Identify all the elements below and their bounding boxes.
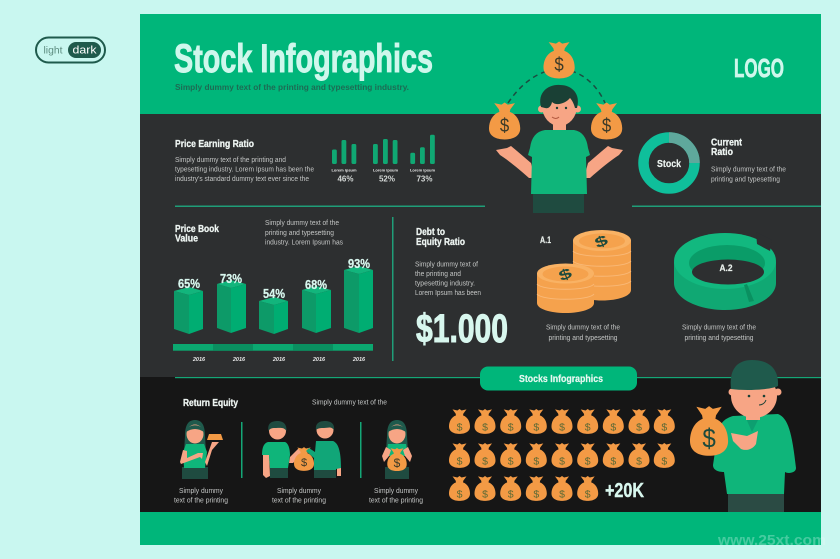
pictogram: money bag grid: $: [585, 455, 591, 467]
caption: A.2: printing and typesetting: [684, 335, 754, 342]
mini bar chart: 52%: [379, 174, 395, 184]
pictogram: money bag grid: $: [661, 421, 667, 433]
icon: large money bag: [690, 406, 728, 456]
pictogram: money bag grid: $: [559, 455, 565, 467]
mini bar chart: Lorem ipsum: [331, 168, 357, 172]
pictogram: money bag grid: $: [636, 421, 642, 433]
bar: 73%: 73%: [220, 272, 242, 286]
callout: +20K: +20K: [605, 480, 644, 502]
icon: coin stacks: $: [593, 232, 611, 252]
watermark: www.25xt.com: [717, 532, 826, 549]
text block: debt to equity ratio: [415, 262, 481, 297]
captions: return equity figures: Simply dummy: [277, 488, 321, 495]
big number: $1.000: $1.000: [416, 307, 508, 351]
divider: [360, 422, 362, 478]
dashed arc between bags: [508, 71, 605, 103]
captions: return equity figures: Simply dummy: [179, 488, 223, 495]
bar: 93%: [344, 257, 373, 333]
text block: debt to equity ratio: Simply dummy text of: [415, 262, 478, 268]
pictogram: money bag grid: $: [559, 421, 565, 433]
caption: A.2: Simply dummy text of the: [682, 324, 756, 332]
pictogram: money bag grid: $: [610, 455, 616, 467]
mini bar chart: [331, 135, 435, 184]
icon: left money bag: $: [500, 115, 509, 137]
pictogram: money bag grid: $: [636, 455, 642, 467]
axis years: 2016: [232, 357, 246, 363]
pictogram: money bag grid: $: [533, 455, 539, 467]
divider: [241, 422, 242, 478]
pictogram: money bag grid: $: [457, 488, 463, 500]
icon: top money bag: $: [554, 54, 564, 76]
pictogram: money bag grid: $: [585, 421, 591, 433]
bar: 54%: [259, 287, 288, 334]
captions: return equity figures: text of the printing: [272, 498, 326, 504]
heading: current ratio: [711, 136, 742, 158]
captions: return equity figures: text of the printing: [174, 498, 228, 504]
pictogram: money bag grid: $: [457, 455, 463, 467]
panel: price earning ratio: [175, 135, 435, 184]
pictogram: money bag grid: $: [610, 421, 616, 433]
axis strip: [173, 344, 373, 351]
mini bar chart: 73%: [416, 174, 433, 184]
figure: woman with gold bar: [180, 420, 223, 479]
pill: stocks infographics: Stocks Infographics: [519, 374, 603, 385]
label: A.2: A.2: [720, 263, 732, 273]
heading: debt to equity ratio: [416, 226, 465, 248]
theme toggle: dark: [72, 44, 97, 56]
bar: 93%: 93%: [348, 257, 370, 271]
heading: debt to equity ratio: Equity Ratio: [416, 236, 465, 248]
icon: right money bag: [591, 103, 622, 139]
text block: price earning ratio: Simply dummy text of the printing and: [175, 157, 286, 164]
isometric bar chart: price book value: [173, 257, 373, 363]
subtitle: Simply dummy text of the printing and typesetting industry.: [175, 82, 409, 92]
heading: price book value: Price Book: [175, 223, 219, 235]
heading: current ratio: Ratio: [711, 146, 733, 158]
heading: price book value: Value: [175, 232, 198, 244]
pictogram: money bag grid: $: [482, 488, 488, 500]
pictogram: money bag grid: $: [508, 488, 514, 500]
character: shrugging man: [496, 85, 623, 213]
figure: two men exchanging bag: $: [301, 457, 307, 469]
text block: price earning ratio: [175, 157, 314, 183]
icon: left money bag: [489, 103, 520, 139]
caption: A.1: Simply dummy text of the: [546, 324, 620, 332]
captions: return equity figures: Simply dummy: [374, 488, 418, 495]
icon: coin stacks: $: [557, 265, 575, 285]
heading: price earning ratio: Price Earning Ratio: [175, 138, 254, 150]
theme toggle: light: [44, 44, 63, 56]
axis years: 2016: [192, 357, 206, 363]
captions: return equity figures: [174, 488, 423, 504]
text block: current ratio: [711, 166, 786, 184]
mini bar chart: Lorem ipsum: [410, 168, 435, 172]
axis years: [192, 357, 366, 363]
mini bar chart: 46%: [337, 174, 354, 184]
heading: price book value: [175, 223, 219, 244]
pictogram: money bag grid: $: [559, 488, 565, 500]
donut chart: current ratio: Stock: [657, 158, 681, 170]
text block: price book value: industry. Lorem Ipsum has: [265, 240, 343, 246]
theme toggle: [36, 38, 105, 62]
pictogram: money bag grid: $: [482, 455, 488, 467]
panel: poster background: [140, 14, 821, 545]
text block: return equity: Simply dummy text of the: [312, 400, 387, 406]
axis years: 2016: [352, 357, 366, 363]
pictogram: money bag grid: $: [585, 488, 591, 500]
bar: 54%: 54%: [263, 287, 285, 301]
donut chart: current ratio: [644, 138, 694, 188]
figure: woman holding bag: $: [394, 456, 401, 470]
bar: 73%: [217, 272, 246, 333]
mini bar chart: Lorem ipsum: [373, 168, 398, 172]
text block: price earning ratio: industry's standard dummy text ever since the: [175, 176, 309, 183]
pictogram: money bag grid: $: [533, 421, 539, 433]
captions: return equity figures: text of the printing: [369, 498, 423, 504]
pill: stocks infographics: [480, 366, 637, 390]
pictogram: money bag grid: $: [457, 421, 463, 433]
icon: 3D ring A.2: [674, 232, 776, 310]
icon: top money bag: [544, 42, 575, 78]
icon: coin stacks: [537, 230, 631, 313]
figure: woman holding bag: [382, 420, 412, 479]
heading: debt to equity ratio: Debt to: [416, 226, 445, 238]
caption: A.2: [682, 324, 756, 342]
title: Stock Infographics: [174, 37, 433, 81]
pictogram: money bag grid: $: [482, 421, 488, 433]
icon: right money bag: $: [602, 115, 611, 137]
pictogram: money bag grid: [449, 409, 675, 501]
caption: A.1: [546, 324, 620, 342]
heading: current ratio: Current: [711, 136, 742, 148]
divider lines: [175, 206, 821, 378]
pictogram: money bag grid: $: [661, 455, 667, 467]
text block: price book value: Simply dummy text of the: [265, 220, 339, 227]
text block: debt to equity ratio: Lorem Ipsum has been: [415, 290, 481, 297]
heading: return equity: Return Equity: [183, 397, 238, 409]
text block: current ratio: printing and typesetting: [711, 176, 780, 184]
bar: 65%: 65%: [178, 277, 200, 291]
pictogram: money bag grid: $: [508, 421, 514, 433]
text block: price book value: printing and typesetting: [265, 230, 334, 237]
axis years: 2016: [272, 357, 286, 363]
text block: current ratio: Simply dummy text of the: [711, 166, 786, 174]
text block: price book value: [265, 220, 343, 246]
caption: A.1: printing and typesetting: [548, 335, 618, 342]
text block: debt to equity ratio: typesetting industry.: [415, 280, 475, 288]
axis years: 2016: [312, 357, 326, 363]
text block: debt to equity ratio: the printing and: [415, 271, 461, 278]
text block: price earning ratio: typesetting industry. Lorem Ipsum has been the: [175, 166, 314, 174]
figure: two men exchanging bag: [262, 421, 341, 478]
bar: 68%: [302, 278, 331, 333]
bar: 65%: [174, 277, 203, 334]
label: A.1: A.1: [540, 235, 551, 245]
icon: large money bag: $: [702, 424, 716, 454]
character: man with money bag: [690, 360, 796, 512]
pictogram: money bag grid: $: [508, 455, 514, 467]
bar: 68%: 68%: [305, 278, 327, 292]
pictogram: money bag grid: $: [533, 488, 539, 500]
logo: LOGO: [734, 53, 784, 83]
